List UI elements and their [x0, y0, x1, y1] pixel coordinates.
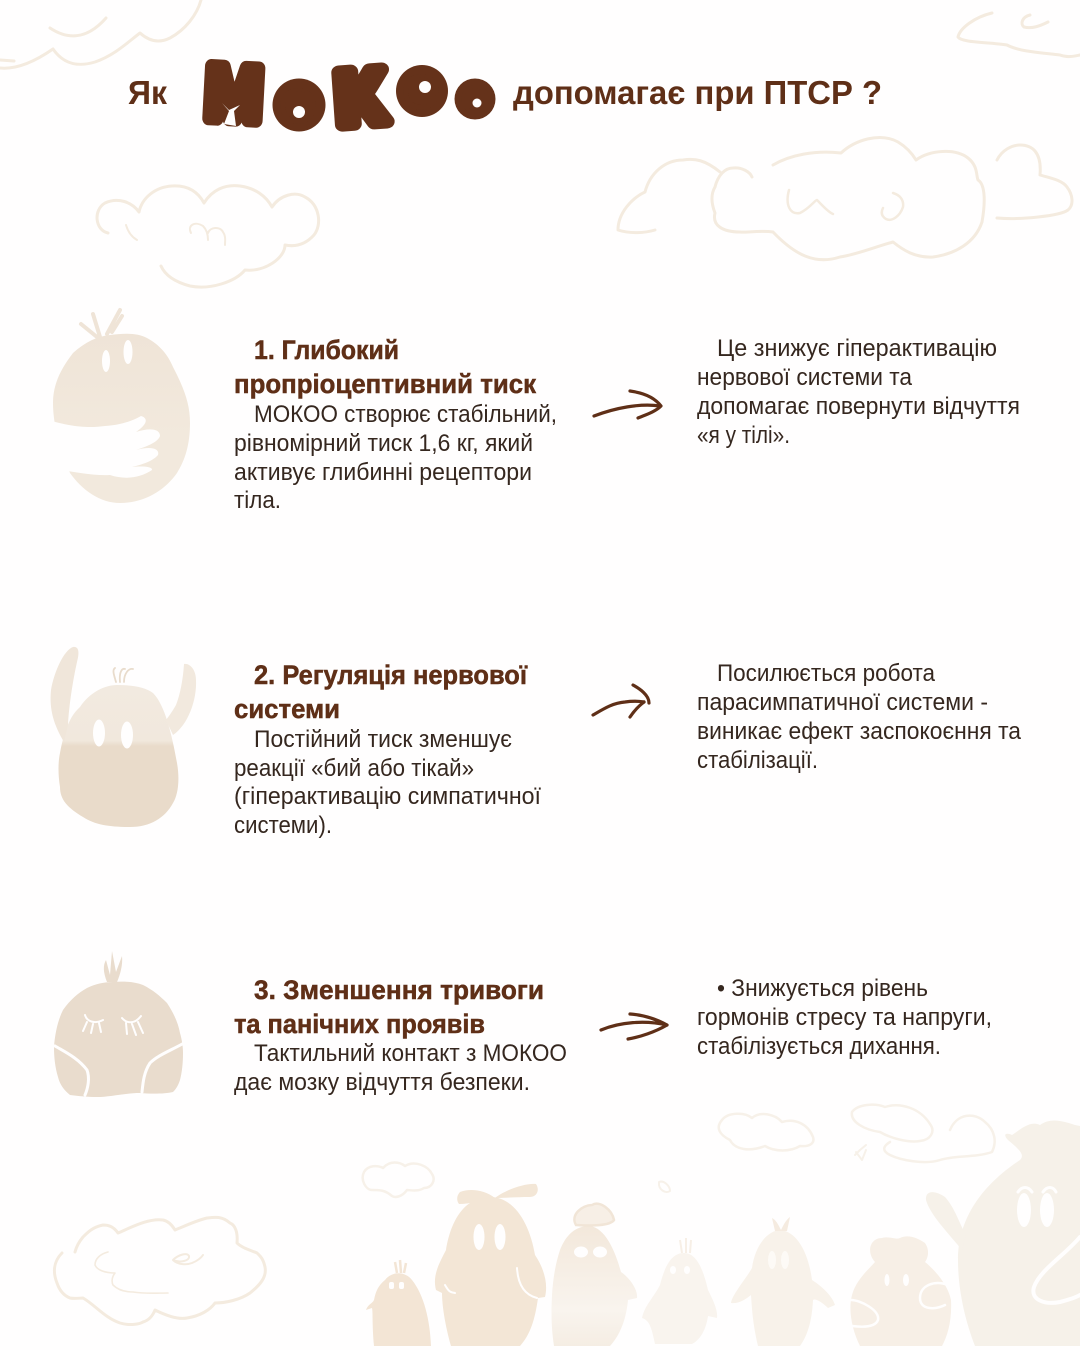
result text 2: [697, 660, 1022, 774]
butterfly marks: [855, 1145, 866, 1160]
text block 3: дає мозку відчуття безпеки.: [234, 1069, 530, 1096]
heading 1: [234, 335, 536, 399]
text block 2: Постійний тиск зменшує: [254, 726, 512, 753]
background clouds bottom: [363, 1105, 995, 1197]
character: tall with crest: [435, 1184, 546, 1346]
icon: character with closed eyes: [54, 951, 184, 1097]
text block 1: тіла.: [234, 487, 281, 514]
logo: МОКОО wordmark: О: [462, 81, 488, 119]
cloud: top left: [0, 0, 201, 68]
result text 2: парасимпатичної системи -: [697, 689, 988, 716]
panel: section 1: [40, 310, 1020, 514]
arrow 1: [594, 391, 661, 418]
title word: Як: Як: [128, 74, 167, 111]
title: [128, 51, 882, 141]
result text 2: стабілізації.: [697, 747, 818, 774]
result text 3: [697, 975, 992, 1060]
character: small chick: [366, 1260, 431, 1346]
bottom characters row: [366, 1120, 1080, 1346]
character: large at right edge: [926, 1120, 1080, 1346]
logo: МОКОО wordmark: О: [281, 82, 315, 131]
text block 1: [234, 401, 557, 514]
result text 3: • Знижується рівень: [717, 975, 928, 1002]
logo: МОКОО wordmark: К: [332, 52, 389, 141]
heading 1: пропріоцептивний тиск: [234, 369, 536, 399]
panel: section 2: [51, 647, 1022, 839]
panel: section 3: [54, 951, 992, 1097]
result text 1: [697, 335, 1020, 449]
cloud: right large: [618, 138, 1072, 260]
result text 3: стабілізується дихання.: [697, 1033, 941, 1060]
heading 2: 2. Регуляція нервової: [254, 660, 528, 690]
arrow 2: [593, 685, 649, 717]
logo: МОКОО wordmark: О: [404, 68, 438, 117]
character: pale chick: [642, 1238, 717, 1344]
heading 1: 1. Глибокий: [254, 335, 399, 365]
arrow 3: [601, 1014, 667, 1039]
icon: character with raised arms: [51, 647, 196, 827]
cloud: left centre: [97, 186, 319, 287]
text block 2: реакції «бий або тікай»: [234, 755, 474, 782]
cloud: top right: [958, 13, 1080, 57]
result text 2: виникає ефект заспокоєння та: [697, 718, 1022, 745]
result text 3: гормонів стресу та напруги,: [697, 1004, 992, 1031]
text block 3: [234, 1040, 567, 1096]
text block 1: МОКОО створює стабільний,: [254, 401, 557, 428]
result text 1: «я у тілі».: [697, 422, 790, 449]
text block 1: активує глибинні рецептори: [234, 459, 532, 486]
cloud: small 4: [884, 1116, 995, 1162]
text block 2: (гіперактивацію симпатичної: [234, 783, 541, 810]
heading 3: та панічних проявів: [234, 1009, 485, 1039]
cloud: small 3: [852, 1105, 932, 1141]
heading 2: [234, 660, 528, 724]
result text 1: допомагає повернути відчуття: [697, 393, 1020, 420]
cloud: small 2: [719, 1114, 813, 1150]
logo: МОКОО wordmark: [203, 51, 496, 141]
icon: hugging character: [40, 310, 190, 503]
text block 1: рівномірний тиск 1,6 кг, який: [234, 430, 533, 457]
text block 3: Тактильний контакт з МОКОО: [254, 1040, 567, 1067]
text block 2: [234, 726, 541, 839]
result text 1: Це знижує гіперактивацію: [717, 335, 997, 362]
character: curly crest: [552, 1204, 637, 1346]
text block 2: системи).: [234, 812, 332, 839]
character: round bear: [850, 1236, 951, 1346]
character: pale with arms: [731, 1217, 835, 1346]
heading 3: 3. Зменшення тривоги: [254, 975, 544, 1005]
cloud: small 1: [363, 1162, 434, 1197]
logo: МОКОО wordmark: М: [203, 51, 264, 138]
result text 2: Посилюється робота: [717, 660, 936, 687]
heading 3: [234, 975, 544, 1039]
cloud: bottom left: [54, 1217, 265, 1325]
heading 2: системи: [234, 694, 340, 724]
title words: допомагає при ПТСР: допомагає при ПТСР ?: [513, 74, 882, 111]
result text 1: нервової системи та: [697, 364, 913, 391]
